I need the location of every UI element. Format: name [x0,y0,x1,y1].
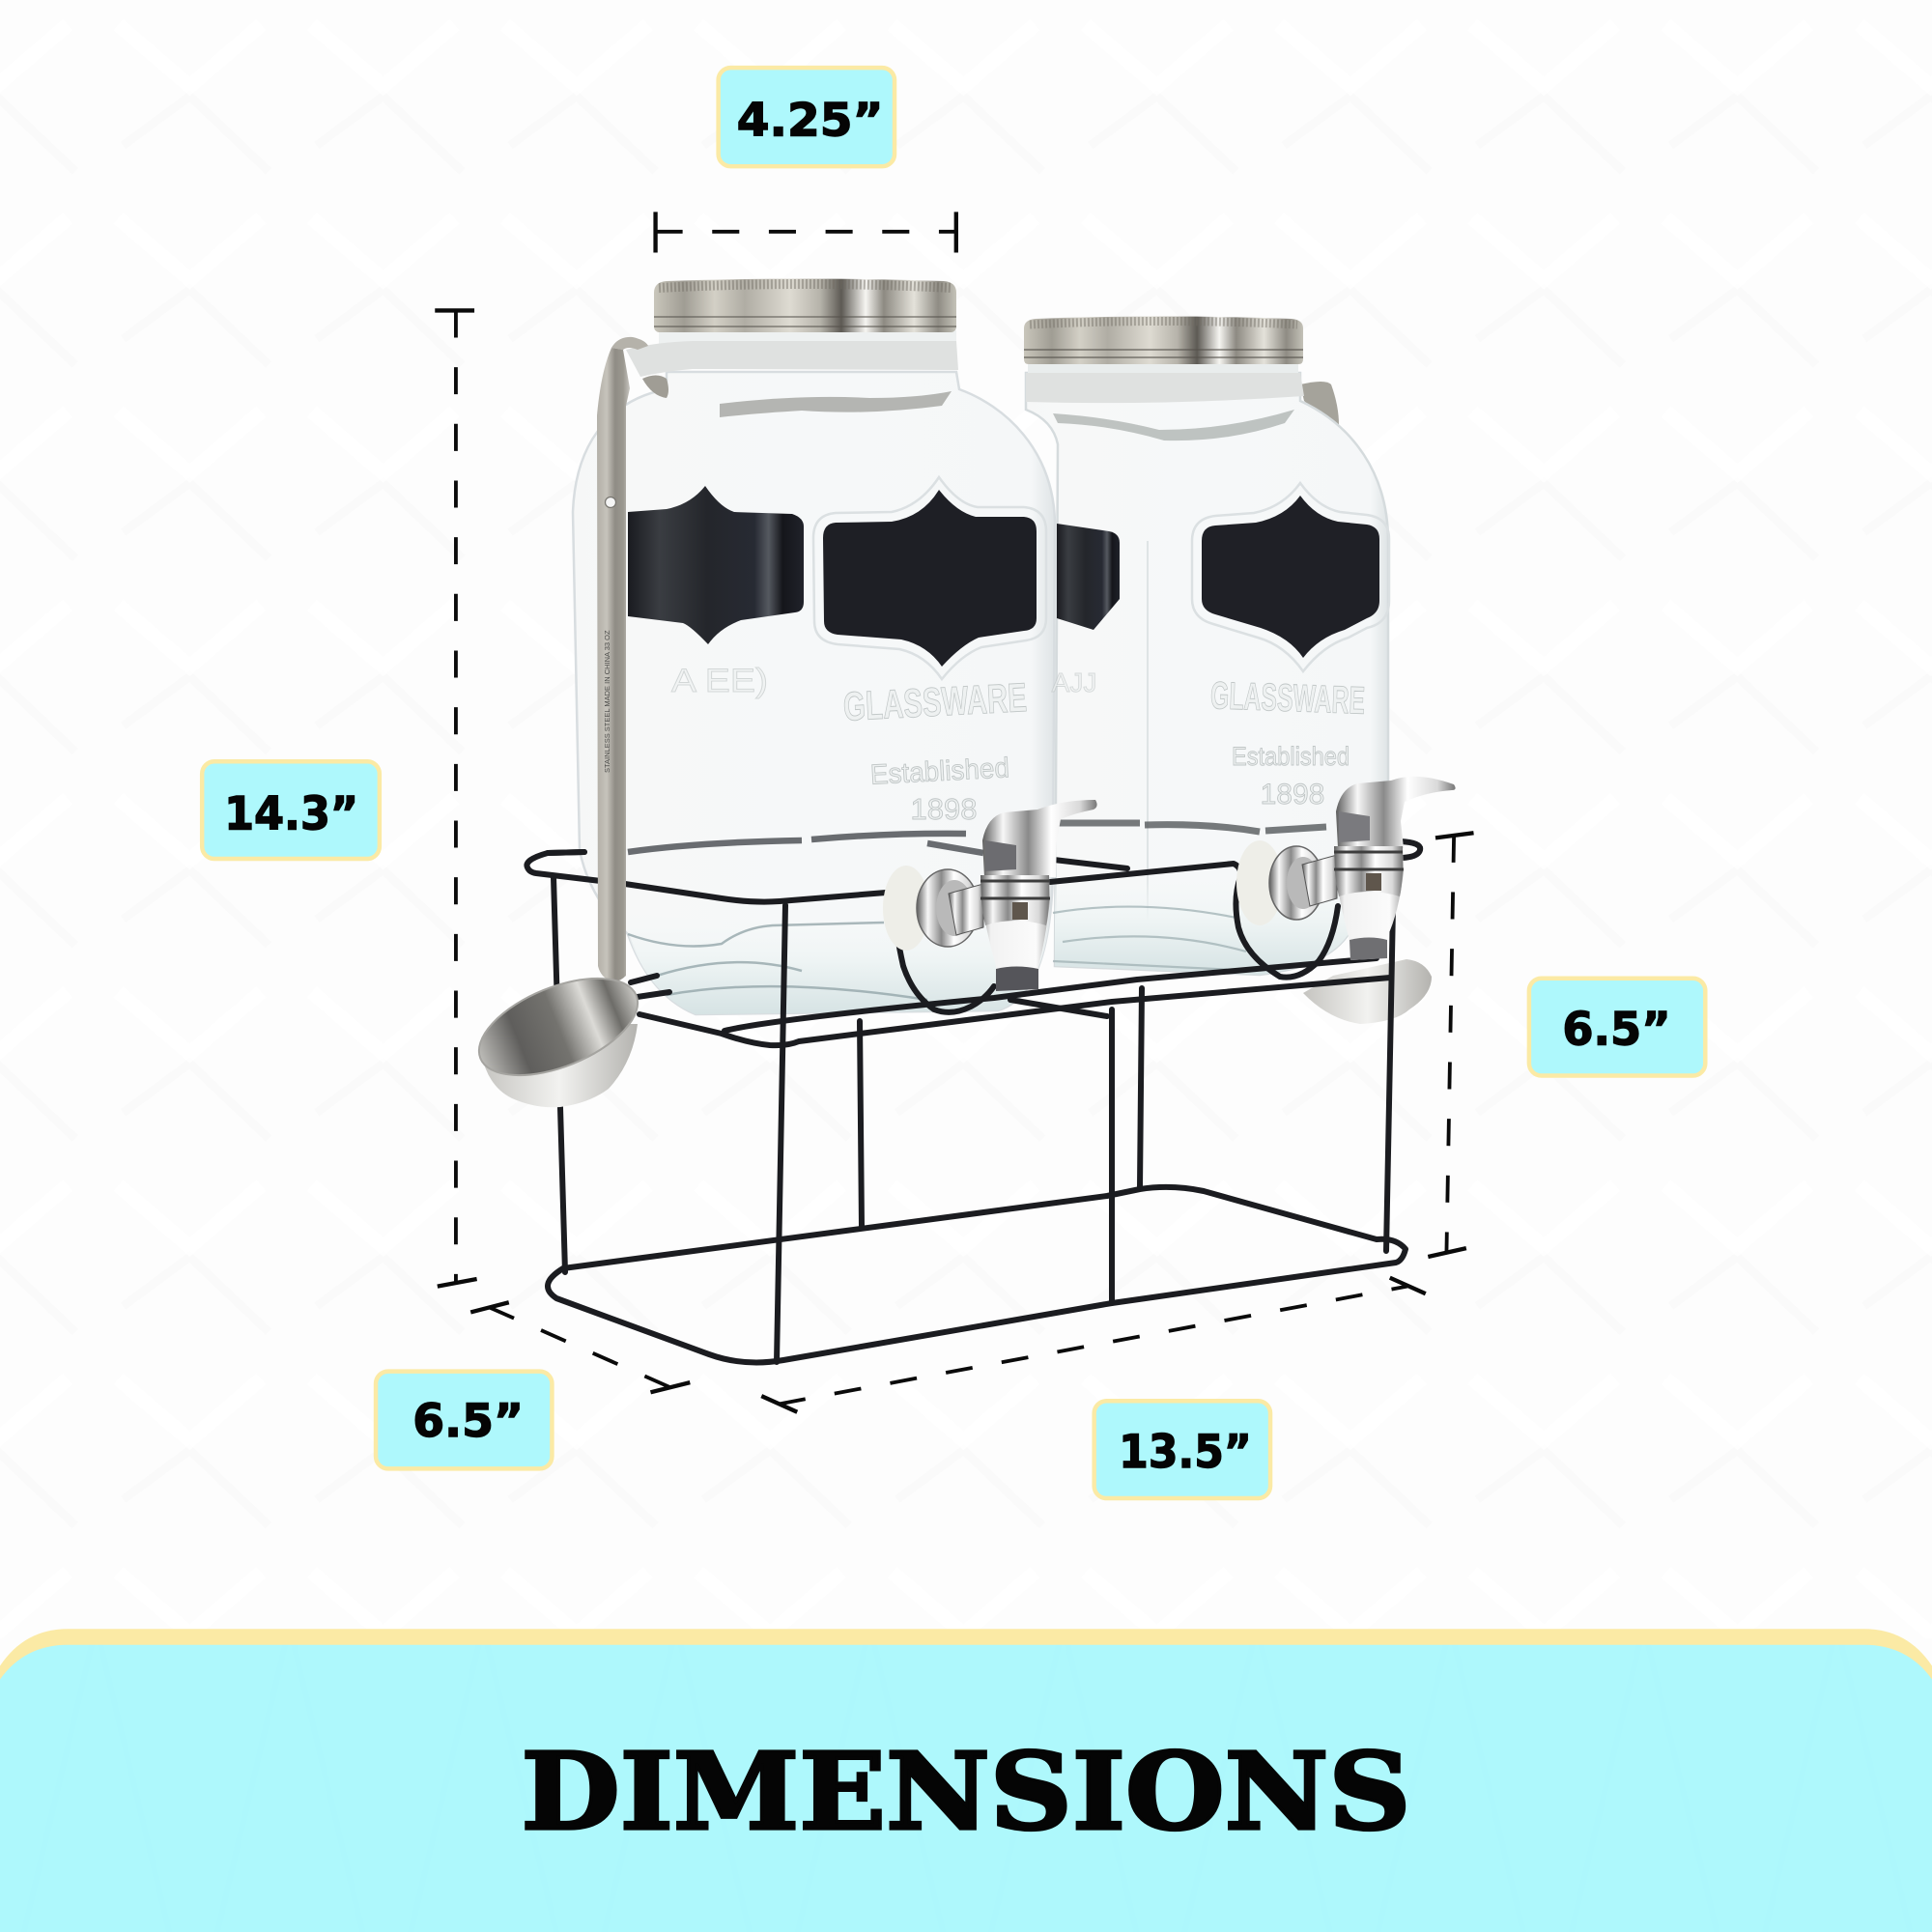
right jar strap [1026,373,1304,403]
left jar body [573,372,1055,1014]
right jar embossed text: Established [1232,742,1350,771]
right jar see-through back plaque [1057,524,1120,630]
ring [1269,846,1323,920]
lever [982,800,1097,877]
collar reflection [1366,873,1381,891]
label: 4.25 inch [719,68,895,166]
left faucet [883,800,1097,991]
left ladle [466,337,668,1107]
collar [980,875,1049,925]
label: 13.5 inch: 13.5” [1119,1426,1252,1479]
footer band [0,1629,1932,1932]
right jar neck [1028,362,1298,376]
ladle bowl inside [466,958,651,1095]
ladle bowl outside [481,1024,638,1107]
left jar plaque frame [813,477,1046,679]
right jar ladle hook [1300,382,1339,425]
ladle hook front [611,337,648,350]
wire stand [526,841,1420,1362]
left jar embossed text: GLASSWARE [842,674,1028,729]
stand lower rail [639,978,1390,1045]
lever [1336,777,1456,848]
label: 6.5 inch depth [376,1372,552,1468]
title: DIMENSIONS [522,1729,1410,1854]
footer yellow edge [0,1629,1932,1932]
collar [1334,846,1403,896]
collar bands [1334,852,1404,869]
body [980,875,1050,991]
right jar embossed text [1209,674,1366,810]
body [1334,846,1404,960]
label: 14.3 inch [202,761,380,859]
stand back legs [554,877,1142,1272]
right jar embossed text: 1898 [1261,779,1324,810]
label: 6.5 inch height: 6.5” [1562,1004,1671,1057]
footer cyan panel [0,1645,1932,1932]
left jar strap [626,341,958,377]
barrel [1302,855,1337,906]
stand inner rails [548,852,1377,1031]
bottom tip [996,966,1038,991]
right jar water line [1057,823,1326,832]
right jar chalkboard plaque [1202,496,1379,658]
barrel [949,884,983,935]
ladle handle [597,348,630,981]
right jar body [1026,373,1388,975]
stand front legs [777,905,1393,1362]
left jar embossed text: 1898 [911,792,977,826]
label: 6.5 inch depth: 6.5” [412,1395,524,1448]
left jar shoulder refraction [720,391,952,417]
lever block [985,840,1016,871]
right jar shoulder refraction [1053,410,1294,440]
left jar neck [659,330,956,344]
product photo drawing [466,278,1456,1362]
ladle engraving: STAINLESS STEEL MADE IN CHINA 33 OZ [603,630,611,773]
left jar base streaks [628,923,927,1000]
right jar embossed text: GLASSWARE [1209,674,1366,723]
right jar lid [1024,316,1303,364]
label: 14.3 inch: 14.3” [224,787,358,840]
right faucet [1236,777,1456,960]
lever block [1339,811,1370,842]
ring [917,869,979,947]
left jar lid [654,278,956,332]
left jar [573,278,1096,1014]
left jar water line [628,834,983,853]
stand bottom frame [548,1187,1406,1362]
left jar embossed text: Established [869,753,1010,791]
dimension arrow: stand depth [470,1302,690,1392]
right jar base glass [1055,869,1352,975]
right jar plaque frame [1192,483,1389,671]
left jar base glass [628,908,1051,1014]
bottom tip [1350,937,1387,960]
dimension arrow: stand length [761,1278,1426,1412]
ladle hole [605,497,616,508]
label: 4.25 inch: 4.25” [737,94,884,147]
dimension arrow: total height [435,310,477,1287]
washer [1236,840,1283,925]
right ladle bowl [1303,959,1432,1024]
left jar embossed text: AJJ [1052,668,1096,697]
washer [883,866,929,951]
label: 6.5 inch height [1529,979,1705,1076]
right jar [1024,316,1389,975]
left jar embossed text [671,663,1096,826]
right jar base streaks [1053,907,1256,971]
ladle hook back [642,375,668,398]
footer texture [0,1645,1932,1932]
right jar inner seam [1147,541,1149,966]
left jar embossed text: A EE) [671,663,768,699]
label: 13.5 inch [1094,1401,1270,1498]
collar bands [980,881,1050,898]
dimension arrow: stand height [1428,833,1474,1257]
collar reflection [1012,902,1028,920]
stand top rail [526,852,994,1012]
dimension arrow: jar width [656,212,956,252]
left jar chalkboard plaque [823,490,1037,667]
left jar see-through back plaque [628,486,804,644]
